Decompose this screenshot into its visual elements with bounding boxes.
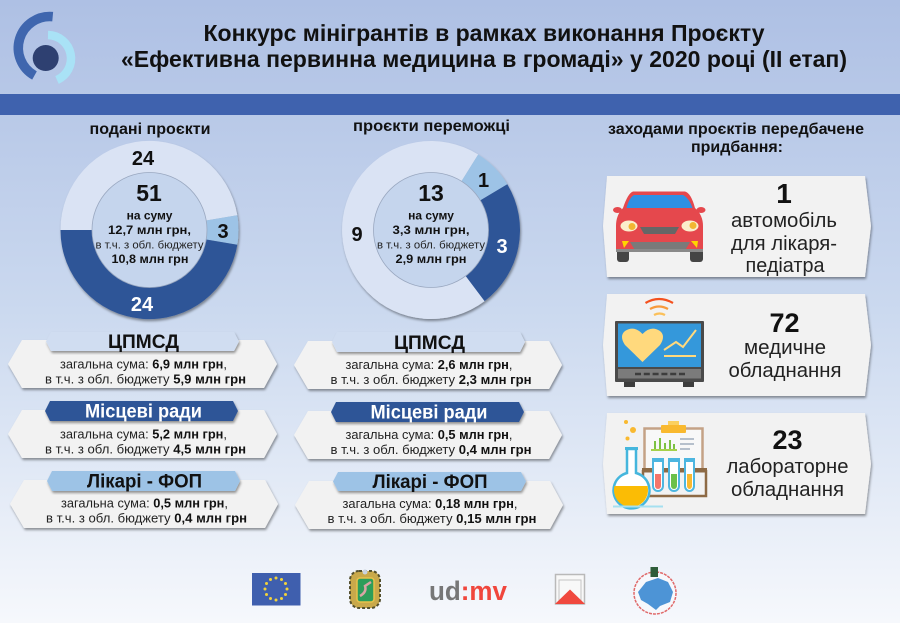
heading: submitted projects: подані проєкти bbox=[90, 121, 210, 138]
donut: winning projects: 2,9 млн грн bbox=[396, 252, 466, 266]
panel: medical equipment: обладнання bbox=[728, 359, 842, 382]
icon: laboratory bbox=[613, 420, 707, 508]
donut: winning projects: на суму bbox=[408, 208, 454, 222]
panel: medical equipment: медичне bbox=[744, 336, 826, 359]
donut: submitted projects bbox=[60, 141, 239, 319]
panel: submitted Місцеві ради: загальна сума: 5,2 млн грн, bbox=[60, 426, 227, 442]
donut: submitted projects: 24 bbox=[132, 148, 155, 170]
icon: heart monitor bbox=[615, 299, 704, 387]
panel: winners Місцеві ради: в т.ч. з обл. бюджету 0,4 млн грн bbox=[330, 442, 532, 457]
donut: winning projects: 3,3 млн грн, bbox=[392, 223, 470, 237]
panel: car: автомобіль bbox=[731, 209, 837, 232]
panel: winners Місцеві ради: Місцеві ради bbox=[370, 402, 488, 424]
donut: winning projects: 9 bbox=[351, 224, 363, 246]
panel: car bbox=[603, 176, 871, 277]
panel: submitted Лікарі - ФОП: Лікарі - ФОП bbox=[87, 472, 202, 492]
donut: winning projects: 1 bbox=[478, 170, 489, 192]
donut: winning projects: 13 bbox=[418, 180, 444, 206]
panel: submitted Лікарі - ФОП: загальна сума: 0,5 млн грн, bbox=[61, 496, 228, 510]
panel: submitted ЦПМСД bbox=[8, 332, 277, 388]
panel: submitted Місцеві ради: в т.ч. з обл. бюджету 4,5 млн грн bbox=[45, 442, 246, 456]
donut: submitted projects: 10,8 млн грн bbox=[112, 252, 188, 266]
panel: submitted ЦПМСД: ЦПМСД bbox=[108, 332, 179, 353]
panel: car: педіатра bbox=[746, 254, 825, 277]
logo bbox=[18, 16, 71, 80]
panel: winners Лікарі - ФОП: Лікарі - ФОП bbox=[372, 472, 488, 493]
panel: winners ЦПМСД: ЦПМСД bbox=[394, 333, 465, 354]
header band bbox=[0, 94, 900, 115]
donut: submitted projects: 51 bbox=[136, 180, 162, 206]
panel: winners ЦПМСД: загальна сума: 2,6 млн грн, bbox=[346, 357, 512, 372]
panel: laboratory equipment: лабораторне bbox=[726, 455, 848, 478]
panel: winners Місцеві ради: загальна сума: 0,5 млн грн, bbox=[346, 427, 512, 442]
panel: winners ЦПМСД bbox=[294, 332, 562, 389]
heading: purchases bbox=[608, 121, 864, 156]
panel: submitted ЦПМСД: загальна сума: 6,9 млн грн, bbox=[60, 356, 227, 372]
panel: medical equipment: 72 bbox=[769, 308, 800, 338]
title: Конкурс мінігрантів в рамках виконання Проєкту bbox=[204, 20, 765, 46]
logo: ud:mv: ud:mv bbox=[429, 576, 507, 606]
panel: laboratory equipment: обладнання bbox=[731, 478, 844, 501]
panel: car: 1 bbox=[776, 178, 792, 209]
donut: submitted projects: на суму bbox=[127, 208, 173, 222]
donut: winning projects: в т.ч. з обл. бюджету bbox=[377, 240, 486, 252]
panel: winners Лікарі - ФОП: в т.ч. з обл. бюджету 0,15 млн грн bbox=[328, 511, 536, 526]
panel: laboratory equipment bbox=[603, 413, 871, 514]
heading: purchases: заходами проєктів передбачене bbox=[608, 121, 864, 138]
heading: purchases: придбання: bbox=[691, 139, 783, 156]
panel: laboratory equipment: 23 bbox=[772, 425, 803, 455]
panel: medical equipment bbox=[603, 294, 871, 396]
donut: winning projects bbox=[342, 141, 520, 319]
donut: submitted projects: в т.ч. з обл. бюджету bbox=[96, 240, 204, 252]
panel: submitted ЦПМСД: в т.ч. з обл. бюджету 5,9 млн грн bbox=[45, 372, 246, 386]
panel: car: для лікаря- bbox=[731, 232, 837, 255]
donut: submitted projects: 24 bbox=[131, 294, 154, 316]
logo: coat of arms bbox=[350, 570, 380, 608]
icon: car bbox=[613, 192, 706, 262]
donut: winning projects: 3 bbox=[496, 236, 508, 258]
panel: winners Лікарі - ФОП bbox=[295, 472, 563, 529]
panel: winners ЦПМСД: в т.ч. з обл. бюджету 2,3 млн грн bbox=[330, 372, 532, 387]
panel: winners Місцеві ради bbox=[294, 402, 562, 459]
title: «Ефективна первинна медицина в громаді» у 2020 році (ІІ етап) bbox=[121, 46, 847, 72]
logo: EU flag bbox=[252, 573, 300, 606]
panel: submitted Лікарі - ФОП bbox=[10, 471, 278, 528]
donut: submitted projects: 12,7 млн грн, bbox=[108, 223, 191, 237]
panel: submitted Місцеві ради bbox=[8, 401, 277, 458]
title bbox=[121, 20, 847, 72]
panel: submitted Лікарі - ФОП: в т.ч. з обл. бюджету 0,4 млн грн bbox=[46, 510, 247, 526]
donut: submitted projects: 3 bbox=[217, 221, 229, 243]
panel: winners Лікарі - ФОП: загальна сума: 0,18 млн грн, bbox=[342, 496, 518, 511]
logo: regional emblem bbox=[634, 567, 676, 614]
panel: submitted Місцеві ради: Місцеві ради bbox=[85, 402, 202, 422]
logo: house bbox=[555, 574, 585, 604]
heading: winning projects: проєкти переможці bbox=[353, 118, 510, 135]
